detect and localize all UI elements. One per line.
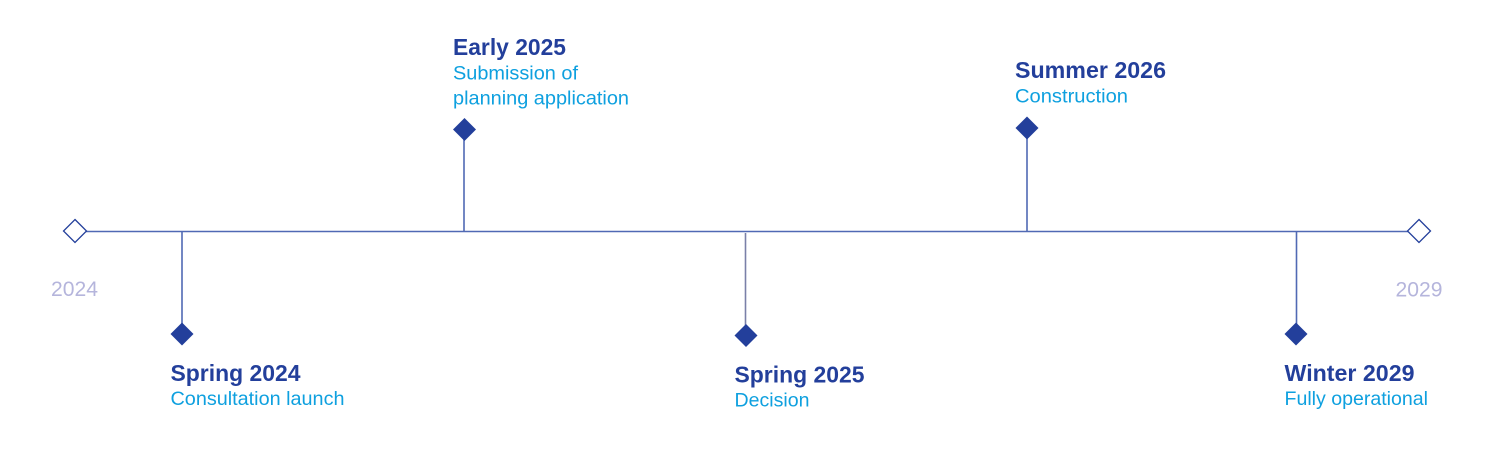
milestone: Early 2025: Submission of (453, 62, 578, 84)
start year label: 2024 (51, 278, 98, 301)
milestone: Early 2025: planning application (453, 88, 629, 110)
milestone: Winter 2029: Winter 2029 (1284, 360, 1414, 386)
milestone: Spring 2025 (734, 233, 865, 412)
milestone: Summer 2026: Summer 2026 (1015, 57, 1166, 83)
milestone: Winter 2029: Fully operational (1284, 388, 1428, 410)
milestone: Spring 2024: Spring 2024 (170, 360, 301, 386)
milestone: Winter 2029 (1284, 232, 1428, 410)
milestone: Spring 2024: Consultation launch (170, 388, 344, 410)
milestone: Early 2025: Early 2025 (453, 34, 566, 60)
main timeline axis (86, 230, 1408, 232)
end year label: 2029 (1396, 278, 1442, 302)
milestone: Early 2025 (453, 34, 629, 231)
milestone: Spring 2025: Decision (734, 390, 810, 412)
milestone: Summer 2026 (1015, 57, 1166, 231)
end marker: hollow diamond (1408, 220, 1430, 242)
milestone: Spring 2025: Spring 2025 (734, 362, 865, 388)
milestone: Summer 2026: Construction (1015, 86, 1128, 108)
start marker: hollow diamond (64, 220, 86, 242)
milestone: Spring 2024 (170, 232, 344, 410)
